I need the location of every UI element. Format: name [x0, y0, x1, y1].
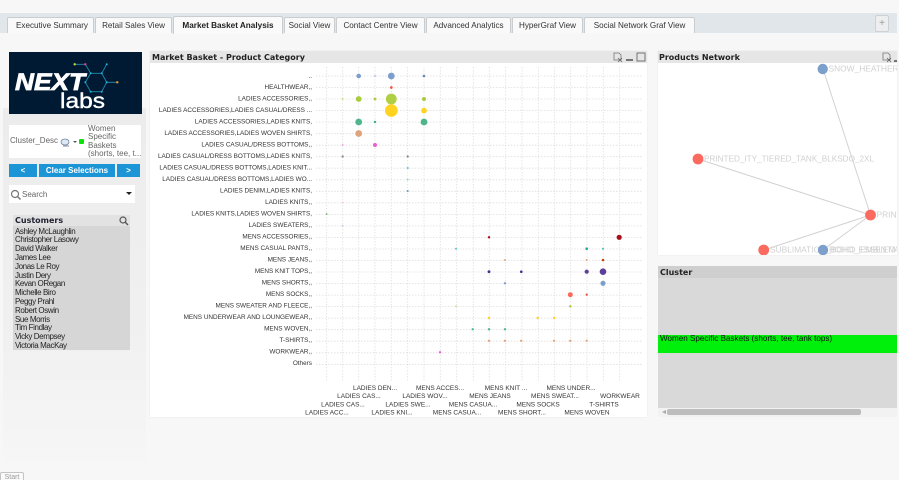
row labels: MENS KNIT TOPS,, — [255, 268, 312, 275]
column labels — [305, 385, 640, 416]
tab: Social Network Graf View: Social Network Graf View — [594, 21, 685, 30]
customer names: Michelle Biro — [15, 288, 56, 297]
tab: HyperGraf View: HyperGraf View — [519, 21, 576, 30]
button: Clear Selections: Clear Selections — [46, 166, 108, 175]
filter value: Women — [88, 124, 115, 133]
column labels: MENS SWEAT... — [531, 393, 579, 400]
row labels: LADIES ACCESSORIES,, — [238, 96, 312, 102]
node: PRINTED_ITY_TIERED_TANK: PRINTED_ITY_TIERED_TANK_BLKSDO_2XL — [704, 154, 874, 164]
panel: customers list — [13, 215, 130, 350]
add tab button: + — [879, 18, 885, 29]
row labels: MENS UNDERWEAR AND LOUNGEWEAR,, — [184, 314, 312, 321]
column labels: LADIES KNI... — [371, 410, 413, 416]
customer names: Sue Morris — [15, 315, 50, 324]
cluster heading — [658, 266, 897, 278]
column labels: LADIES ACC... — [305, 410, 349, 416]
customer names: Christopher Lasowy — [15, 235, 78, 244]
tab bar — [0, 13, 897, 33]
panel: market basket chart — [150, 51, 647, 417]
customer names: James Lee — [15, 253, 51, 262]
row labels: LADIES CASUAL/DRESS BOTTOMS,LADIES KNITS, — [158, 153, 312, 160]
column labels: MENS WOVEN — [564, 410, 610, 416]
customer names: Tim Findlay — [15, 323, 52, 332]
row labels: LADIES SWEATERS,, — [249, 222, 312, 229]
filter value: Baskets — [88, 141, 116, 150]
start tab — [0, 472, 24, 480]
column labels: WORKWEAR — [600, 393, 640, 400]
row labels: LADIES KNITS,LADIES WOVEN SHIRTS, — [191, 210, 312, 218]
tab: Retail Sales View: Retail Sales View — [102, 21, 165, 30]
column labels: MENS SOCKS — [516, 402, 560, 408]
bubbles — [326, 73, 622, 353]
network window icons — [882, 52, 897, 62]
customer names: Ashley McLaughlin — [15, 227, 75, 236]
icon: green selected state — [79, 139, 84, 144]
row labels: MENS WOVEN,, — [264, 326, 312, 332]
tab: Contact Centre View: Contact Centre View — [343, 21, 418, 30]
customer names: Justin Dery — [15, 271, 51, 280]
customer names: Vicky Dempsey — [15, 332, 65, 341]
icon: dropdown arrow — [126, 192, 132, 195]
selected cluster row — [658, 335, 897, 353]
logo: NEXT labs — [9, 52, 142, 114]
column labels: T-SHIRTS — [589, 402, 619, 408]
scrollbar left arrow — [662, 410, 666, 414]
customer names — [15, 227, 79, 350]
chart window icons — [614, 52, 646, 62]
chart heading: Market Basket - Product Category — [152, 53, 305, 62]
tab: Market Basket Analysis (active): Market Basket Analysis — [182, 21, 274, 30]
tab: Market Basket Analysis (active) — [173, 16, 283, 34]
button: previous: < — [21, 166, 25, 175]
tab: HyperGraf View — [512, 17, 583, 33]
row labels: MENS ACCESSORIES,, — [242, 234, 312, 240]
row labels: T-SHIRTS,, — [279, 337, 312, 344]
column labels: MENS ACCES... — [416, 385, 464, 392]
scrollbar thumb — [667, 409, 861, 415]
tab: Advanced Analytics: Advanced Analytics — [433, 21, 504, 30]
column labels: LADIES CAS... — [337, 393, 381, 400]
row labels: LADIES CASUAL/DRESS BOTTOMS,, — [201, 142, 312, 148]
customer names: Victoria MacKay — [15, 341, 67, 350]
tab: Social View: Social View — [289, 21, 330, 30]
button: next — [117, 164, 140, 177]
row labels: LADIES DENIM,LADIES KNITS, — [220, 188, 312, 194]
customers heading: Customers — [15, 216, 63, 225]
logo: NEXT labs: NEXT — [15, 69, 88, 96]
column labels: MENS CASUA... — [449, 402, 497, 408]
row labels: LADIES ACCESSORIES,LADIES KNITS, — [195, 118, 312, 126]
horizontal scrollbar — [658, 408, 897, 417]
row labels — [158, 73, 312, 367]
column labels: MENS CASUA... — [433, 410, 481, 416]
customer names: Kevan ORegan — [15, 279, 65, 288]
customer names: Robert Oswin — [15, 306, 59, 315]
tab: Social View — [284, 17, 335, 33]
row labels: LADIES CASUAL/DRESS BOTTOMS,LADIES WO... — [162, 176, 312, 183]
tab: Contact Centre View — [336, 17, 425, 33]
row labels: MENS SWEATER AND FLEECE,, — [216, 302, 312, 310]
column labels: MENS SHORT... — [498, 410, 546, 416]
tab: Retail Sales View — [95, 17, 172, 33]
column labels: MENS JEANS — [469, 393, 511, 400]
row labels: WORKWEAR,, — [269, 348, 312, 356]
customer names: David Walker — [15, 244, 57, 253]
panel: cluster — [658, 266, 897, 417]
button: previous — [9, 164, 37, 177]
column labels: LADIES WOV... — [402, 393, 448, 400]
filter value: (shorts, tee, t... — [88, 149, 141, 158]
panel: products network — [658, 51, 897, 255]
network heading — [658, 51, 897, 63]
tab: Social Network Graf View — [584, 17, 695, 33]
column labels: LADIES SWE... — [385, 402, 431, 408]
tab: Advanced Analytics — [426, 17, 511, 33]
filter value: Specific — [88, 132, 116, 141]
column labels: LADIES DEN... — [353, 385, 397, 392]
icon: search customers — [119, 216, 128, 226]
cluster heading: Cluster — [660, 268, 692, 277]
customer names: Jonas Le Roy — [15, 262, 59, 271]
filter label: Cluster_Desc — [10, 136, 58, 145]
row labels: LADIES CASUAL/DRESS BOTTOMS,LADIES KNIT... — [159, 164, 312, 172]
row labels: MENS JEANS,, — [268, 256, 312, 264]
add tab button — [875, 15, 889, 32]
chart heading — [150, 51, 647, 63]
panel: left sidebar — [3, 108, 146, 462]
search box — [9, 185, 135, 203]
tab: Executive Summary — [7, 17, 94, 33]
row labels: .. — [308, 73, 312, 80]
filter value — [88, 124, 141, 158]
customers heading — [13, 215, 130, 226]
row labels: HEALTHWEAR,, — [265, 84, 312, 91]
node: PRINT — [865, 210, 899, 220]
customer names: Peggy Prahl — [15, 297, 54, 306]
button: next: > — [126, 166, 131, 175]
search box: Search — [22, 190, 47, 199]
bubble matrix chart — [158, 67, 642, 416]
network heading: Products Network — [659, 53, 740, 62]
row labels: LADIES ACCESSORIES,LADIES WOVEN SHIRTS, — [164, 130, 312, 137]
column labels: LADIES CAS... — [321, 402, 365, 408]
node: SUBLIMATION: SUBLIMATION_BOHO_EMBLEM — [770, 244, 896, 254]
tab: Executive Summary: Executive Summary — [16, 21, 88, 30]
network graph — [692, 64, 897, 255]
node: SNOW_HEATHER: SNOW_HEATHER — [828, 64, 897, 74]
column labels: MENS UNDER... — [546, 385, 596, 392]
button: Clear Selections — [39, 164, 115, 177]
row labels: LADIES KNITS,, — [265, 199, 312, 206]
filter box: Cluster_Desc — [9, 125, 141, 158]
icon: magnifier — [10, 190, 21, 200]
row labels: MENS CASUAL PANTS,, — [240, 245, 312, 252]
column labels: MENS KNIT ... — [485, 385, 527, 392]
row labels: MENS SHORTS,, — [262, 280, 312, 286]
logo: NEXT labs: labs — [60, 90, 105, 113]
row labels: LADIES ACCESSORIES,LADIES CASUAL/DRESS ... — [159, 107, 312, 114]
selected cluster row: Women Specific Baskets (shorts, tee, tank tops) — [660, 334, 832, 343]
icon: eraser — [60, 138, 77, 146]
row labels: Others — [293, 360, 312, 367]
row labels: MENS SOCKS,, — [266, 291, 312, 298]
